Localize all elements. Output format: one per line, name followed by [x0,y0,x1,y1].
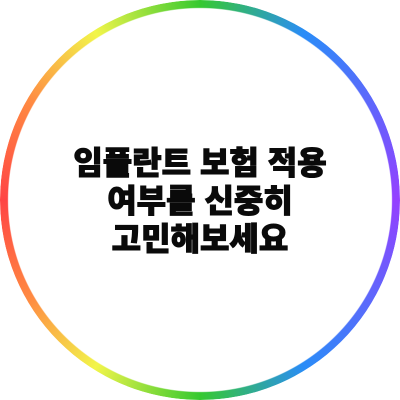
title: 고민해보세요 [112,221,288,257]
title [73,145,327,257]
title: 임플란트 보험 적용 [73,145,327,181]
title: 여부를 신중히 [107,183,293,219]
